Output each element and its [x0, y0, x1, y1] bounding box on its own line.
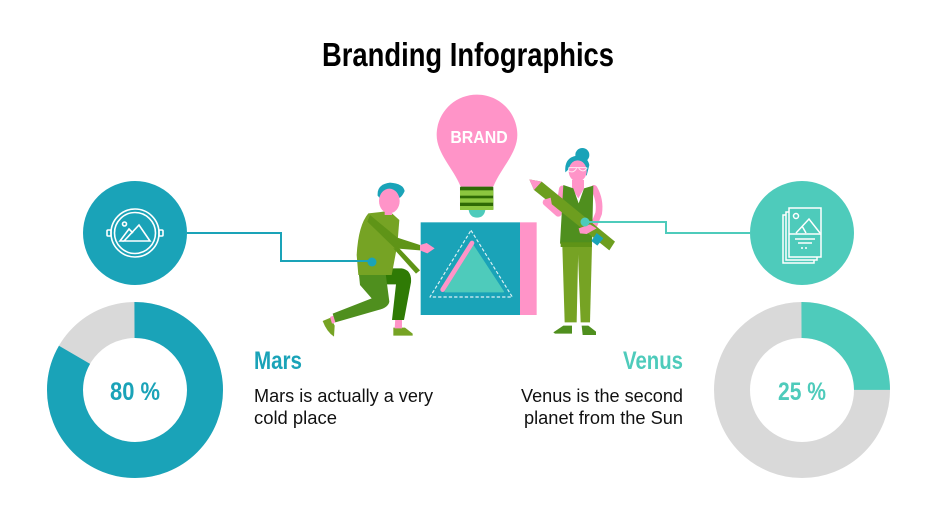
text block: Venus: Venus is the second	[521, 386, 683, 406]
icon: Venus circle	[750, 181, 854, 285]
text block: Mars	[254, 347, 433, 428]
donut value: 80 %	[110, 378, 160, 406]
donut chart: Mars 80%	[65, 320, 205, 460]
donut chart: Venus 25%	[732, 320, 872, 460]
connector: Venus	[580, 218, 750, 233]
text block: Mars: cold place	[254, 408, 337, 428]
illustration: branding scene	[323, 95, 615, 337]
icon: Mars circle	[83, 181, 187, 285]
text block: Venus	[521, 347, 683, 428]
title: Branding Infographics	[322, 36, 614, 73]
text block: Venus: planet from the Sun	[524, 408, 683, 428]
donut value: 25 %	[778, 378, 826, 406]
man figure	[323, 183, 435, 337]
box with triangle	[421, 222, 537, 315]
bulb label: BRAND	[450, 127, 508, 147]
connector: Mars	[187, 233, 376, 266]
text block: Venus: Venus	[623, 347, 683, 375]
icon: light bulb	[437, 95, 517, 218]
text block: Mars: Mars is actually a very	[254, 386, 433, 406]
text block: Mars: Mars	[254, 347, 302, 375]
woman figure	[529, 148, 615, 335]
